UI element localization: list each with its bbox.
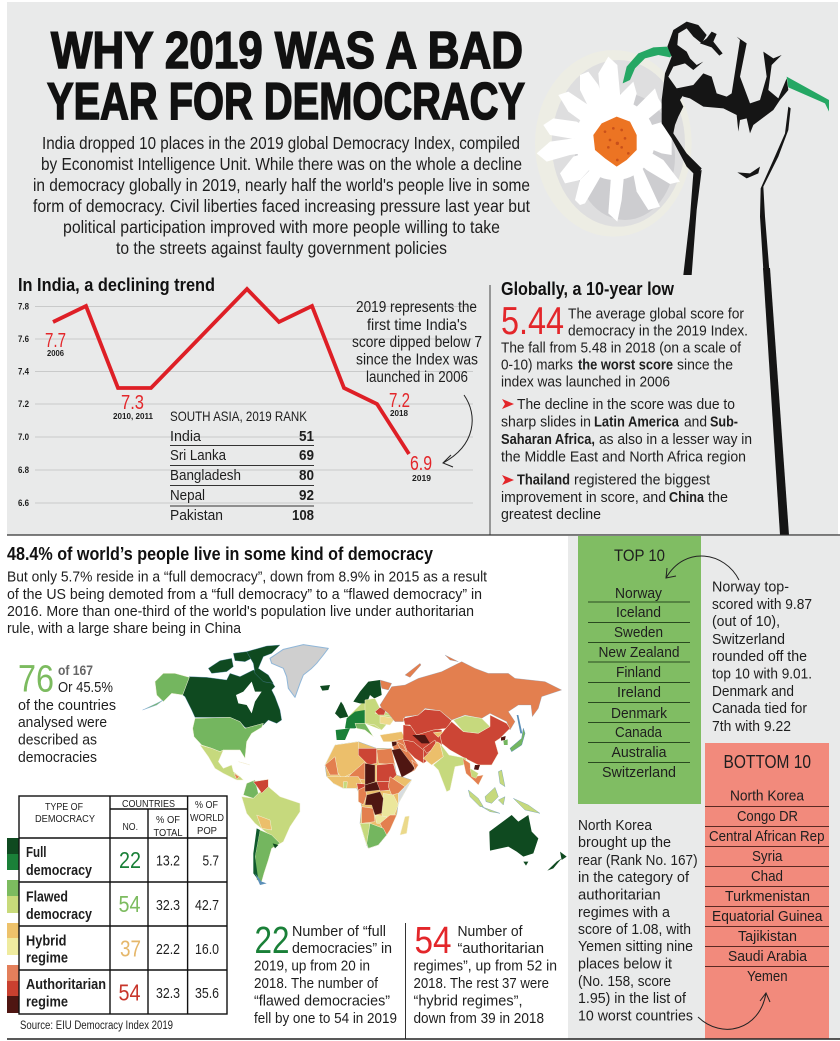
text: global score: The fall from 5.48 in 2018 (on a scale of (501, 340, 742, 357)
panel: bottom 10: BOTTOM 10 (724, 752, 811, 772)
y axis labels: 7.8 (18, 302, 29, 312)
bullet: Thailand and China: greatest decline (501, 506, 601, 523)
panel: bottom 10: Yemen (747, 968, 788, 985)
text: Norway note: (out of 10), (712, 613, 780, 630)
table header: WORLD (190, 812, 224, 824)
panel: top 10: Switzerland (602, 764, 676, 781)
row: flawed democracy: democracy (26, 906, 93, 923)
data labels: 2006 (47, 349, 65, 358)
table: South Asia rank: Nepal (170, 487, 205, 504)
panel: top 10 (578, 536, 701, 804)
table: South Asia rank: 80 (299, 467, 314, 484)
panel: bottom 10 (705, 743, 829, 1039)
bullet: Thailand and China: Thailand (517, 472, 570, 489)
bullet: Thailand and China: registered the biggest (574, 472, 711, 489)
panel: bottom 10: Central African Rep (709, 828, 824, 845)
callout: 54 authoritarian regimes: “authoritarian (458, 940, 544, 957)
table: South Asia rank: 51 (299, 428, 314, 445)
row: hybrid regime: regime (26, 950, 68, 967)
callout: 22 full democracies: 22 (254, 920, 290, 962)
bullet: Thailand and China: China (669, 489, 705, 506)
title: YEAR FOR DEMOCRACY (47, 73, 525, 131)
text: Norway note: 7th with 9.22 (712, 718, 791, 735)
text: global score: The average global score for (568, 306, 744, 323)
table header: DEMOCRACY (35, 813, 95, 825)
row: full democracy: democracy (26, 862, 93, 879)
callout: 76 of 167: of 167 (58, 662, 93, 678)
bullet: Thailand and China (501, 472, 728, 523)
text: Norway note: top 10 with 9.01. (712, 666, 812, 683)
panel: bottom 10: Syria (752, 848, 783, 865)
text: North Korea note: places below it (578, 956, 673, 973)
world map (143, 645, 567, 885)
text: North Korea note (578, 817, 698, 1025)
text: North Korea note: brought up the (578, 834, 671, 851)
table header: NO. (122, 821, 138, 833)
data labels: 2019 (412, 474, 432, 483)
callout: 76 of 167: of the countries (18, 697, 116, 714)
map: Russia and Asia (380, 655, 562, 792)
map: Southeast Asia and Oceania (463, 758, 567, 871)
callout: 76 of 167: democracies (18, 749, 97, 766)
callout: 22 full democracies: fell by one to 54 in 2019 (254, 1010, 397, 1027)
panel: bottom 10: Tajikistan (738, 928, 797, 945)
line chart (53, 289, 409, 454)
y axis labels: 7.4 (18, 366, 29, 376)
text: full democracy share: 2016. More than one-third of the world's population live under authoritarian (7, 603, 474, 620)
row: flawed democracy: 32.3 (156, 897, 180, 914)
callout: 54 authoritarian regimes: regimes”, up from 52 in (414, 958, 557, 975)
row: flawed democracy: 54 (118, 891, 141, 917)
panel: bottom 10: North Korea (730, 788, 805, 805)
text: Norway note: rounded off the (712, 648, 807, 665)
bullet: decline: Sub- (710, 414, 738, 431)
callout: 76 of 167: 76 (18, 659, 54, 701)
panel: top 10: Sweden (614, 624, 663, 641)
text: full democracy share: of the US being demoted from a “full democracy” to a “flawed democracy” in (7, 586, 482, 603)
callout: 54 authoritarian regimes: “hybrid regimes”, (414, 993, 522, 1010)
table: South Asia rank: India (170, 428, 202, 445)
bullet: decline: and (684, 414, 707, 431)
arrow: note to Norway (666, 556, 739, 580)
table header: % OF (195, 799, 218, 811)
heading: India: In India, a declining trend (18, 275, 215, 295)
panel: top 10: Australia (612, 744, 667, 761)
panel: bottom 10: Saudi Arabia (728, 948, 808, 965)
table: South Asia rank: SOUTH ASIA, 2019 RANK (170, 408, 308, 424)
callout: 54 authoritarian regimes: down from 39 in 2018 (414, 1010, 544, 1027)
callout: 22 full democracies: 2019, up from 20 in (254, 958, 370, 975)
panel: top 10: Iceland (616, 604, 661, 621)
arrow: note to Yemen (698, 993, 770, 1029)
bullet: decline: sharp slides in (501, 414, 591, 431)
map: Americas and Greenland (143, 645, 328, 885)
callout: 76 of 167: Or 45.5% (58, 679, 113, 696)
row: hybrid regime: 16.0 (195, 941, 219, 958)
panel: bottom 10: Equatorial Guinea (712, 908, 823, 925)
y axis labels: 7.0 (18, 432, 29, 442)
text: global score (501, 306, 748, 391)
heading: Globally: Globally, a 10-year low (501, 279, 675, 299)
table: South Asia rank: Sri Lanka (170, 447, 227, 464)
text: Norway note (712, 579, 812, 735)
bullet: decline: Saharan Africa, (501, 431, 595, 448)
text: North Korea note: in the category of (578, 869, 690, 886)
text: Norway note: Switzerland (712, 631, 785, 648)
panel: bottom 10: Chad (751, 868, 783, 885)
bullet: Thailand and China: improvement in score, and (501, 489, 666, 506)
text: North Korea note: North Korea (578, 817, 653, 834)
data labels: 7.2 (389, 390, 410, 412)
row: authoritarian regime: 35.6 (195, 985, 219, 1002)
callout: 22 full democracies: Number of “full (292, 923, 386, 940)
text: global score: the worst score (578, 356, 673, 374)
bullet: decline (501, 396, 752, 466)
y axis labels (18, 302, 29, 508)
annotation: score dipped below 7 (352, 334, 482, 351)
row: full democracy (26, 844, 219, 879)
callout: 22 full democracies: “flawed democracies” (254, 993, 390, 1010)
callout: 54 authoritarian regimes: 2018. The rest 37 were (414, 975, 549, 992)
text: global score: 0-10) marks (501, 356, 573, 374)
data labels: 7.3 (121, 392, 144, 414)
data labels: 7.7 (45, 330, 66, 352)
row: hybrid regime: 22.2 (156, 941, 180, 958)
text: North Korea note: Yemen sitting nine (578, 938, 693, 955)
panel: top 10: New Zealand (598, 644, 680, 661)
text: Norway note: scored with 9.87 (712, 596, 812, 613)
row: full democracy: 13.2 (156, 853, 180, 870)
intro paragraph: India dropped 10 places in the 2019 global Democracy Index, compiled (42, 133, 520, 153)
map: Europe and Africa (320, 680, 418, 848)
callout: 76 of 167 (18, 659, 116, 766)
callout: 76 of 167: analysed were (18, 714, 107, 731)
text: global score: democracy in the 2019 Index. (568, 323, 748, 340)
panel: Globally a 10-year low (501, 279, 752, 523)
callout: 22 full democracies: 2018. The number of (254, 975, 379, 992)
text: full democracy share: But only 5.7% reside in a “full democracy”, down from 8.9% in 2015 as a result (7, 569, 488, 586)
text: North Korea note: score of 1.08, with (578, 921, 691, 938)
data labels: 2010, 2011 (113, 412, 154, 421)
row: authoritarian regime: Authoritarian (26, 976, 106, 993)
y axis labels: 6.8 (18, 465, 29, 475)
bullet: decline: Latin America (594, 414, 680, 431)
data labels: 2018 (390, 409, 409, 418)
row: hybrid regime (26, 933, 219, 967)
row: full democracy: 5.7 (202, 853, 219, 870)
intro paragraph: form of democracy. Civil liberties faced increasing pressure last year but (33, 196, 530, 216)
text: Norway note: Denmark and (712, 683, 794, 700)
row: authoritarian regime: 32.3 (156, 985, 180, 1002)
table: South Asia rank: 69 (299, 447, 314, 464)
panel: top 10: TOP 10 (614, 546, 665, 565)
row: hybrid regime: Hybrid (26, 933, 66, 950)
row: authoritarian regime: 54 (118, 980, 141, 1006)
row: hybrid regime: 37 (120, 936, 141, 962)
callout: 54 authoritarian regimes (414, 920, 557, 1027)
panel: top 10: Finland (616, 664, 661, 681)
source: Source: EIU Democracy Index 2019 (20, 1020, 173, 1032)
text: North Korea note: 10 worst countries (578, 1008, 693, 1025)
callout: 22 full democracies (254, 920, 397, 1027)
big number 5.44: 5.44 (501, 300, 564, 343)
text: North Korea note: 1.95) in the list of (578, 990, 687, 1007)
panel: top 10: Ireland (617, 684, 661, 701)
panel: top 10: Norway (615, 585, 662, 602)
text: North Korea note: (No. 158, score (578, 973, 671, 990)
table: South Asia rank: 92 (299, 487, 314, 504)
intro paragraph: in democracy globally in 2019, nearly half the world's people live in some (33, 175, 530, 195)
table: South Asia rank (170, 408, 314, 524)
panel: top 10: Canada (615, 724, 663, 741)
row: flawed democracy: 42.7 (195, 897, 219, 914)
table header: COUNTRIES (122, 798, 175, 810)
intro paragraph: political participation improved with more people willing to take (63, 217, 500, 237)
callout: 76 of 167: described as (18, 732, 97, 749)
text: full democracy share: rule, with a large share being in China (7, 620, 242, 637)
table header: TYPE OF (45, 801, 83, 813)
data labels (45, 330, 432, 483)
bullet: decline: The decline in the score was due to (517, 396, 735, 413)
text: North Korea note: rear (Rank No. 167) (578, 852, 698, 869)
callout: 54 authoritarian regimes: 54 (414, 920, 452, 962)
callout: 54 authoritarian regimes: Number of (458, 923, 523, 940)
table header (35, 798, 224, 839)
y axis labels: 7.6 (18, 334, 29, 344)
text: global score: since the (677, 356, 733, 374)
annotation: since the Index was (356, 352, 478, 368)
intro paragraph (33, 133, 530, 258)
title: WHY 2019 WAS A BAD (51, 22, 523, 80)
table header: % OF (156, 814, 180, 826)
callout: 22 full democracies: democracies” in (292, 940, 392, 957)
bullet: decline: the Middle East and North Africa region (501, 449, 746, 466)
row: authoritarian regime: regime (26, 994, 68, 1011)
legend colour bars (7, 838, 19, 1013)
text: Norway note: Norway top- (712, 579, 789, 596)
row: full democracy: 22 (119, 847, 141, 873)
table: South Asia rank: Bangladesh (170, 467, 241, 484)
panel: top 10: Denmark (611, 705, 667, 722)
panel: bottom 10: Congo DR (737, 808, 798, 825)
row: flawed democracy (26, 889, 219, 923)
text: Norway note: Canada tied for (712, 700, 807, 717)
row: authoritarian regime (26, 976, 219, 1011)
row: flawed democracy: Flawed (26, 889, 68, 906)
data labels: 6.9 (410, 453, 432, 475)
text: global score: index was launched in 2006 (501, 374, 670, 391)
panel: bottom 10: Turkmenistan (725, 888, 810, 905)
title (47, 22, 525, 131)
table: type of democracy (19, 796, 227, 1014)
table header: POP (197, 825, 217, 837)
text: North Korea note: authoritarian (578, 887, 661, 904)
arrow: to 6.9 (443, 395, 472, 467)
annotation: launched in 2006 (366, 369, 468, 386)
illustration: fist holding daisy (535, 22, 829, 275)
intro paragraph: by Economist Intelligence Unit. While there was on the whole a decline (41, 154, 522, 174)
annotation: 2019 represents the (356, 299, 477, 316)
intro paragraph: to the streets against faulty government policies (116, 238, 447, 258)
text: full democracy share (7, 569, 488, 637)
table: South Asia rank: Pakistan (170, 507, 223, 524)
heading: 48.4% of people: 48.4% of world’s people live in some kind of democracy (7, 544, 433, 564)
bullet: Thailand and China: the (708, 489, 728, 506)
text: North Korea note: regimes with a (578, 904, 671, 921)
table: South Asia rank: 108 (292, 507, 314, 524)
panel: India declining trend (18, 275, 482, 524)
bullet: decline: as also in a lesser way in (599, 431, 752, 448)
arm line continuing (763, 268, 789, 535)
annotation: first time India's (367, 317, 467, 334)
y axis labels: 6.6 (18, 498, 29, 508)
table header: TOTAL (154, 827, 183, 839)
y axis labels: 7.2 (18, 399, 29, 409)
row: full democracy: Full (26, 844, 46, 861)
annotation (352, 299, 482, 386)
